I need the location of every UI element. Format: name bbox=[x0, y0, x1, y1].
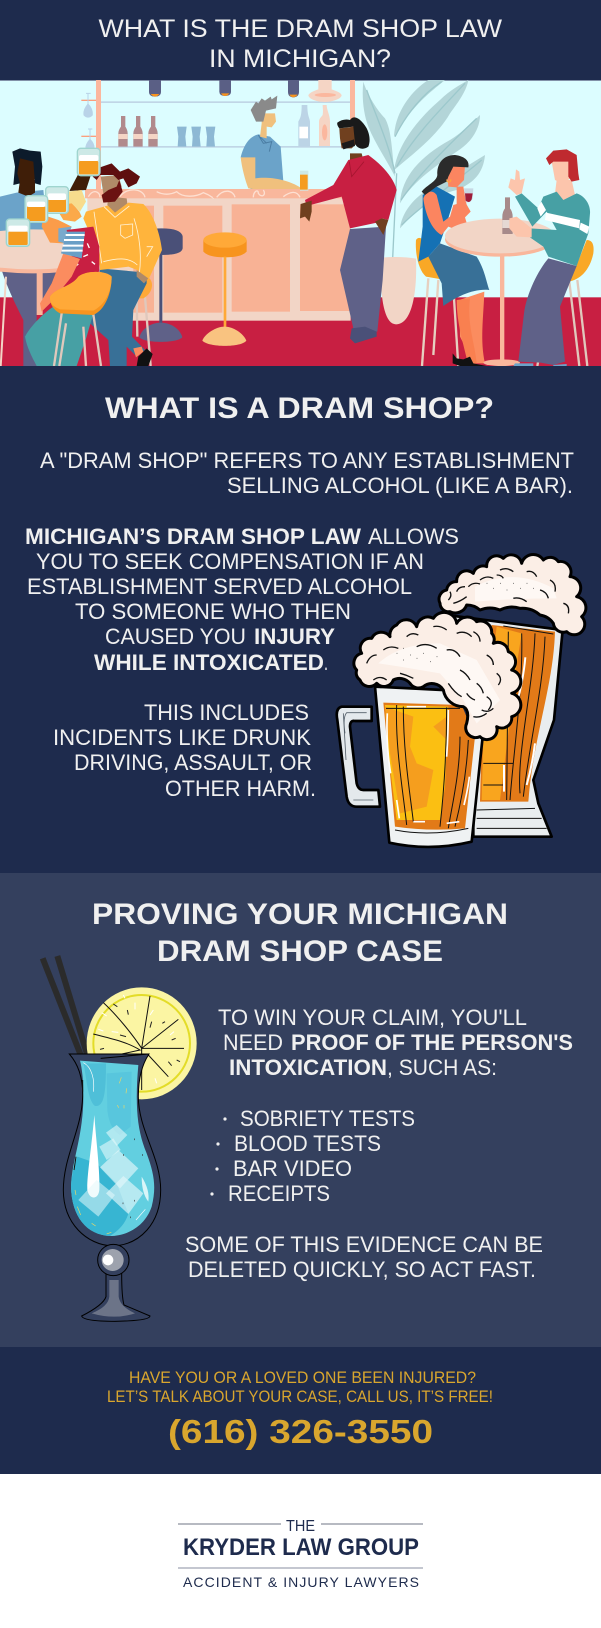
phone number: (616) 326-3550 bbox=[168, 1413, 433, 1450]
text block: act fast: DELETED QUICKLY, SO ACT FAST. bbox=[188, 1257, 536, 1282]
heading: DRAM SHOP CASE bbox=[157, 935, 443, 968]
icon: two beer mugs bbox=[337, 554, 586, 847]
text block: included incidents: DRIVING, ASSAULT, OR bbox=[74, 750, 312, 775]
man with dark hair at table bbox=[0, 148, 91, 367]
heading: WHAT IS A DRAM SHOP? bbox=[105, 392, 494, 425]
text block: included incidents: OTHER HARM. bbox=[165, 776, 316, 801]
glass stem and base bbox=[82, 1244, 150, 1321]
text block: law explanation: YOU TO SEEK COMPENSATION IF AN bbox=[36, 549, 424, 574]
panel: title banner bbox=[0, 0, 601, 81]
title: WHAT IS THE DRAM SHOP LAW bbox=[98, 15, 502, 43]
straws bbox=[43, 956, 89, 1062]
text block: law explanation: WHILE INTOXICATED bbox=[94, 650, 324, 675]
text block: law explanation: TO SOMEONE WHO THEN bbox=[75, 599, 351, 624]
logo: The Kryder Law Group: KRYDER LAW GROUP bbox=[183, 1534, 419, 1561]
text block: law explanation: CAUSED YOU bbox=[105, 624, 246, 649]
front mug bbox=[337, 687, 483, 847]
icon: blue cocktail bbox=[43, 956, 197, 1321]
bar stool: orange bbox=[202, 232, 247, 346]
text block: included incidents bbox=[53, 700, 316, 801]
text block: law explanation: INJURY bbox=[254, 624, 335, 649]
right table bbox=[445, 197, 555, 366]
text block: proof needed bbox=[218, 1005, 573, 1080]
woman with wine at table bbox=[416, 155, 489, 366]
man in teal sweater bbox=[508, 149, 594, 366]
title: IN MICHIGAN? bbox=[209, 45, 391, 73]
text block: law explanation: ALLOWS bbox=[368, 524, 459, 549]
bartender bbox=[241, 96, 302, 195]
list: evidence types: BAR VIDEO bbox=[233, 1156, 352, 1181]
list: evidence types: SOBRIETY TESTS bbox=[240, 1106, 415, 1131]
title bbox=[98, 15, 502, 73]
back bar shelves bbox=[81, 80, 355, 192]
text block: law explanation: . bbox=[324, 650, 328, 675]
heading: PROVING YOUR MICHIGAN bbox=[92, 898, 508, 931]
text block: proof needed: INTOXICATION bbox=[229, 1055, 387, 1080]
text block: act fast bbox=[185, 1232, 543, 1282]
callout text: HAVE YOU OR A LOVED ONE BEEN INJURED? bbox=[129, 1369, 476, 1387]
panel: proving your case bbox=[0, 873, 601, 1347]
text block: act fast: SOME OF THIS EVIDENCE CAN BE bbox=[185, 1232, 543, 1257]
orange chair bbox=[50, 272, 112, 366]
text block: definition: A "DRAM SHOP" REFERS TO ANY ESTABLISHMENT bbox=[40, 448, 574, 473]
panel: what is a dram shop bbox=[0, 367, 601, 873]
small beer glass bbox=[300, 171, 308, 191]
left table bbox=[0, 229, 116, 367]
text block: law explanation: MICHIGAN’S DRAM SHOP LAW bbox=[25, 524, 361, 549]
panel: call to action bbox=[0, 1347, 601, 1474]
glass and drink bbox=[63, 1054, 161, 1246]
floor bbox=[0, 297, 601, 367]
callout text bbox=[107, 1369, 493, 1406]
text block: included incidents: INCIDENTS LIKE DRUNK bbox=[53, 725, 311, 750]
potted plant bbox=[363, 80, 485, 324]
text block: proof needed: TO WIN YOUR CLAIM, YOU'LL bbox=[218, 1005, 527, 1030]
logo: The Kryder Law Group: THE bbox=[286, 1518, 315, 1535]
list: evidence types: RECEIPTS bbox=[228, 1181, 330, 1206]
bar counter bbox=[85, 189, 351, 321]
text block: definition: SELLING ALCOHOL (LIKE A BAR). bbox=[227, 473, 573, 498]
list: evidence types: BLOOD TESTS bbox=[234, 1131, 381, 1156]
beer mugs raised bbox=[6, 148, 100, 246]
logo: The Kryder Law Group: ACCIDENT & INJURY LAWYERS bbox=[183, 1574, 419, 1590]
man in red sweater bbox=[300, 117, 397, 343]
man in yellow sweater bbox=[83, 163, 162, 366]
bar stool: dark bbox=[139, 228, 183, 342]
callout text: LET’S TALK ABOUT YOUR CASE, CALL US, IT’S FREE! bbox=[107, 1388, 493, 1406]
text block: law explanation: ESTABLISHMENT SERVED ALCOHOL bbox=[27, 574, 412, 599]
text block: proof needed: , SUCH AS: bbox=[387, 1055, 497, 1080]
illustration: people drinking in a bar bbox=[0, 80, 601, 368]
lemon slice bbox=[87, 987, 197, 1099]
text block: included incidents: THIS INCLUDES bbox=[144, 700, 309, 725]
logo: The Kryder Law Group bbox=[178, 1518, 423, 1590]
front foam bbox=[354, 612, 521, 740]
back foam bbox=[439, 554, 586, 635]
text block: law explanation bbox=[25, 524, 459, 675]
text block: definition bbox=[40, 448, 574, 498]
text block: proof needed: PROOF OF THE PERSON'S bbox=[291, 1030, 573, 1055]
text block: proof needed: NEED bbox=[223, 1030, 283, 1055]
list: evidence types bbox=[210, 1106, 415, 1206]
heading bbox=[92, 898, 508, 968]
blond man in striped shirt bbox=[25, 190, 99, 366]
back beer glass bbox=[447, 615, 563, 837]
